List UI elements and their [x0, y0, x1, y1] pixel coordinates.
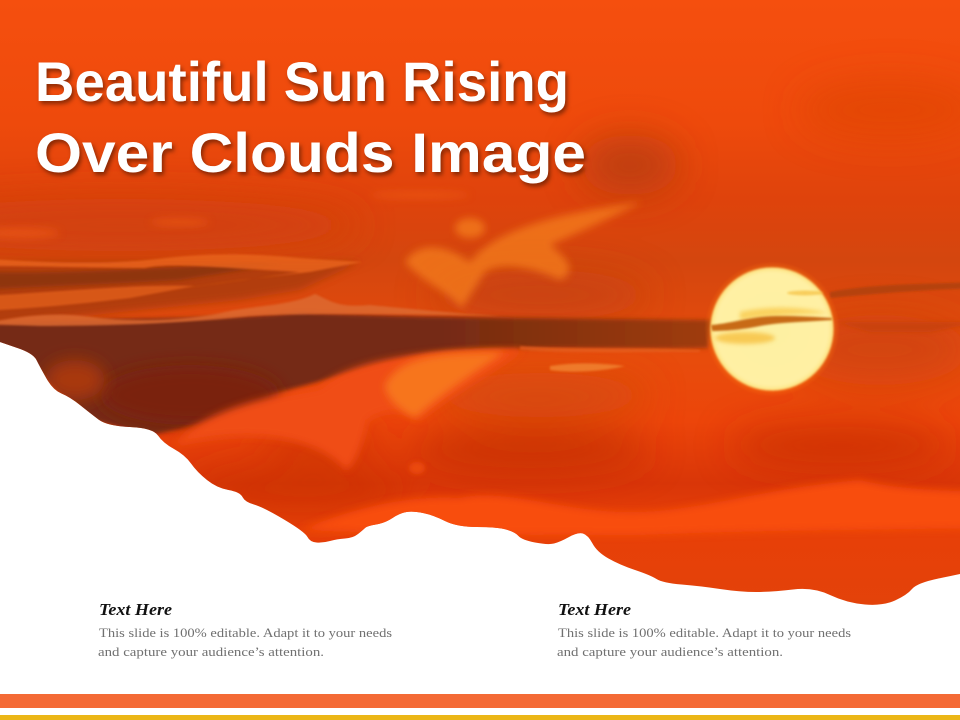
- upper center clouds: [405, 202, 642, 308]
- footer bar: orange: [0, 694, 960, 708]
- text block: left: This slide is 100% editable. Adapt it to your needs: [99, 625, 392, 640]
- sun: [704, 261, 840, 397]
- dim streaks in upper sky: [0, 191, 470, 239]
- bright cloud rims: [0, 254, 700, 372]
- text block: right: This slide is 100% editable. Adapt it to your needs: [558, 625, 851, 640]
- dark cloud band: [0, 262, 960, 435]
- text block: left: and capture your audience’s attention.: [98, 644, 324, 659]
- bright low cloud bank: [300, 480, 960, 535]
- title: Over Clouds Image: [35, 121, 586, 184]
- text block: left: Text Here: [99, 600, 172, 619]
- text block: right: and capture your audience’s attention.: [557, 644, 783, 659]
- title: [35, 50, 586, 184]
- text block: left: [98, 600, 392, 659]
- text block: right: Text Here: [558, 600, 631, 619]
- text block: right: [557, 600, 851, 659]
- lower center clouds: [175, 350, 522, 474]
- footer bar: yellow: [0, 715, 960, 720]
- title: Beautiful Sun Rising: [35, 50, 569, 113]
- soft sky haze: [0, 80, 960, 518]
